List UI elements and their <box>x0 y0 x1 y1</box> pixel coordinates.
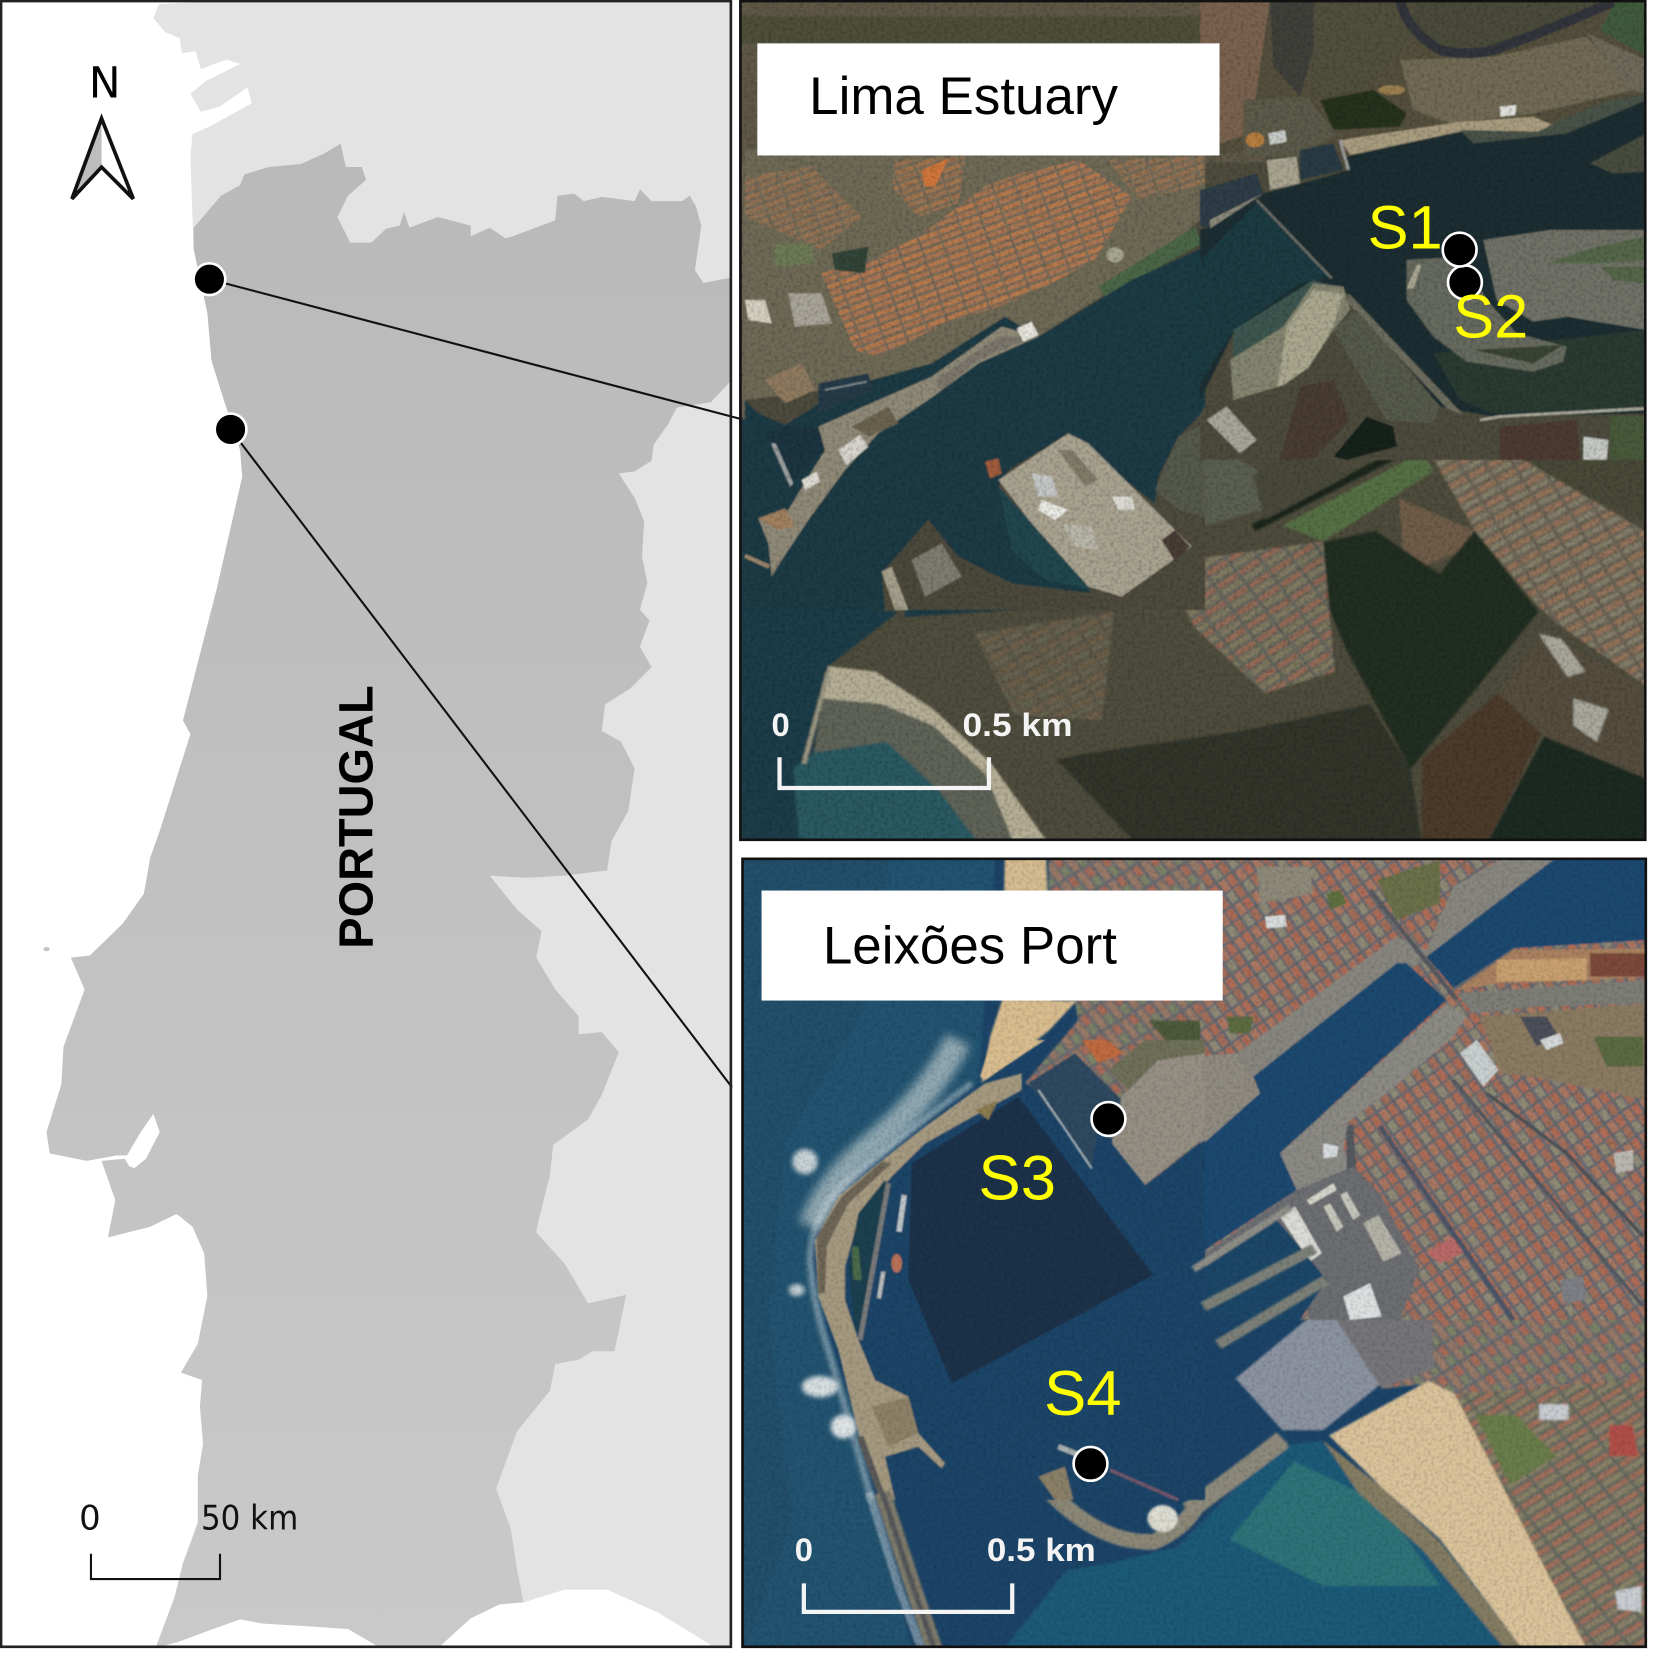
aerial imagery: Lima Estuary <box>740 0 1650 846</box>
port terminal <box>998 433 1192 597</box>
label S1: S1 <box>1368 193 1443 262</box>
leader line to Leixões Port <box>231 429 732 1087</box>
south-west harbour block <box>882 520 1112 610</box>
port storage <box>1200 1167 1420 1320</box>
map: land areas of Spain and Portugal <box>43 2 730 1648</box>
site marker S2 <box>1448 265 1482 299</box>
scale bar: 0.5 km, Leixões <box>795 1531 1096 1612</box>
east city fill <box>1382 1264 1650 1399</box>
forests <box>1300 531 1539 769</box>
title box: Leixões Port <box>762 891 1223 1001</box>
aerial tile: Matosinhos urban area and canal <box>1200 860 1647 1320</box>
title box: Lima Estuary <box>757 43 1220 155</box>
quay strip <box>758 327 1038 577</box>
north arrow: N <box>89 58 121 107</box>
south quay <box>1280 1003 1467 1190</box>
site marker S3 <box>1092 1102 1125 1136</box>
scale bar: 50 km <box>79 1498 298 1579</box>
north arrow <box>72 58 133 199</box>
northeast block <box>1480 1003 1647 1100</box>
aerial tile: upper estuary land <box>1200 0 1647 157</box>
marina <box>818 373 873 413</box>
site marker S1 <box>1443 233 1477 267</box>
label S4: S4 <box>1044 1359 1122 1429</box>
country label: PORTUGAL <box>329 685 383 949</box>
aerial tile: town and river mouth <box>745 150 1205 610</box>
title box: Lima Estuary: Lima Estuary <box>809 67 1119 126</box>
north urban land <box>1025 849 1551 1186</box>
south sea and beach <box>775 610 898 838</box>
eastern side <box>1480 409 1649 520</box>
top sand beach <box>1002 849 1052 1001</box>
aerial tile: outer harbour and breakwater <box>789 1040 1205 1500</box>
location marker: Leixões <box>215 414 246 445</box>
river water <box>745 247 1205 610</box>
jetty <box>1040 1438 1282 1542</box>
basin <box>1200 1220 1327 1320</box>
panel: Leixões Port aerial map <box>739 849 1650 1658</box>
scale bar: 0.5 km, Lima: 0.5 km <box>963 706 1073 743</box>
scale bar: 0.5 km, Lima <box>771 706 1073 788</box>
site marker S4 <box>1074 1447 1107 1481</box>
teal sea south <box>996 1441 1522 1658</box>
scale bar: 0.5 km, Lima: 0 <box>771 706 790 743</box>
scale bar: 50 km: 50 km <box>201 1498 298 1537</box>
panel: Lima Estuary aerial map <box>740 0 1650 846</box>
residential south <box>876 610 1074 759</box>
location marker: Lima <box>194 263 225 295</box>
panel: Iberian overview map <box>1 1 740 1648</box>
scale bar: 0.5 km, Leixões: 0.5 km <box>987 1531 1096 1568</box>
scale bar: 50 km: 0 <box>79 1498 101 1537</box>
title box: Leixões Port: Leixões Port <box>823 917 1117 976</box>
aerial tile: upper estuary water and islands <box>1200 93 1647 460</box>
leader line to Lima Estuary <box>209 279 740 419</box>
marsh and field <box>1204 460 1262 526</box>
label S3: S3 <box>978 1143 1056 1213</box>
label S2: S2 <box>1453 281 1528 350</box>
south-east blocks <box>1455 1378 1650 1658</box>
harbour piers and lower breakwater <box>869 1207 1326 1658</box>
canal water <box>1427 860 1647 988</box>
SE beach <box>1329 1381 1592 1648</box>
urban roads <box>1427 1237 1463 1263</box>
aerial imagery: Leixões Port <box>739 849 1650 1658</box>
scale bar: 0.5 km, Leixões: 0 <box>795 1531 813 1568</box>
